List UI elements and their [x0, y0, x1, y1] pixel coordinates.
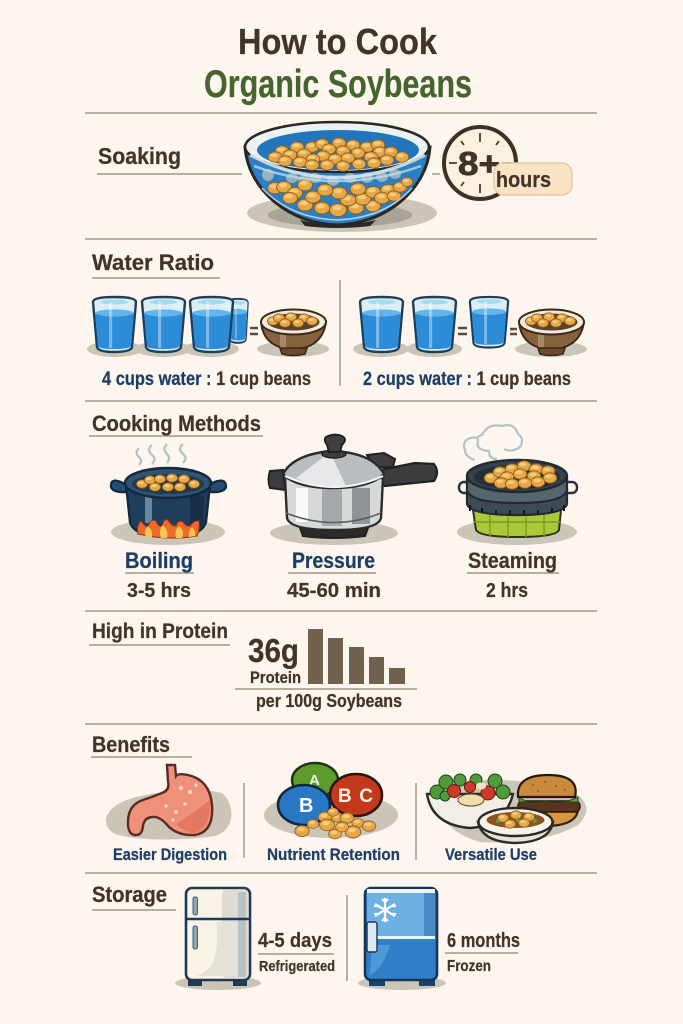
label: 4-5 days refrigerated: Refrigerated — [259, 958, 335, 975]
icon: vitamins and beans: A — [309, 772, 320, 789]
label: boiling 3-5 hrs: 3-5 hrs — [127, 580, 191, 602]
heading: storage: Storage — [92, 882, 167, 907]
section: benefits — [91, 732, 586, 864]
heading: high in protein: High in Protein — [92, 620, 228, 643]
title: Organic Soybeans — [204, 63, 472, 106]
icon: vitamins and beans: B C — [338, 786, 373, 807]
label: boiling 3-5 hrs: Boiling — [125, 548, 193, 573]
icon: snowflake — [374, 898, 396, 922]
heading: benefits: Benefits — [92, 732, 170, 757]
icon: clock with 8+ hours: 8+ — [458, 145, 500, 182]
icon: pressure cooker — [268, 434, 437, 545]
icon: clock with 8+ hours: hours — [496, 167, 551, 192]
heading: soaking: Soaking — [98, 143, 181, 169]
heading: cooking methods: Cooking Methods — [92, 411, 261, 436]
section: cooking methods — [89, 411, 577, 602]
label: 4-5 days refrigerated: 4-5 days — [258, 930, 332, 952]
section: storage — [92, 882, 520, 990]
label: 4-5 days refrigerated — [258, 930, 335, 975]
stat: 36g protein: 36g — [248, 632, 299, 669]
label: 2 cups water : 1 cup beans: 2 cups water : 1 cup beans — [363, 369, 571, 390]
icon: steamer with beans — [457, 425, 577, 545]
label: nutrient retention: Nutrient Retention — [267, 845, 400, 864]
label: easier digestion: Easier Digestion — [113, 846, 227, 864]
label: boiling 3-5 hrs — [125, 548, 194, 602]
burger — [518, 775, 580, 826]
title: How to Cook — [238, 21, 438, 62]
label: steaming 2 hrs: 2 hrs — [486, 580, 528, 602]
label: pressure 45-60 min: 45-60 min — [287, 580, 381, 602]
icon: stomach — [106, 765, 231, 840]
salad bowl — [427, 774, 513, 828]
section: soaking — [97, 122, 572, 232]
icon: freezer — [358, 888, 446, 990]
bar chart: protein — [308, 629, 405, 684]
label: 6 months frozen — [445, 930, 520, 975]
label: 6 months frozen: 6 months — [447, 930, 520, 952]
section: water ratio — [87, 250, 587, 390]
label: 4 cups water : 1 cup beans: 4 cups water : 1 cup beans — [102, 369, 311, 390]
title — [204, 21, 472, 106]
icon: vitamins and beans: B — [299, 795, 313, 817]
icon: refrigerator — [175, 888, 261, 990]
icon: boiling pot on flame — [111, 444, 226, 545]
label: steaming 2 hrs: Steaming — [468, 548, 557, 573]
diagram: 4 cups water to 1 cup beans — [87, 297, 329, 357]
label: 6 months frozen: Frozen — [447, 958, 491, 975]
caption: per 100g soybeans: per 100g Soybeans — [256, 691, 402, 711]
soup bowl — [478, 808, 553, 843]
icon: glass bowl of soaking soybeans — [245, 122, 437, 232]
label: steaming 2 hrs — [467, 548, 559, 602]
section: high in protein — [89, 620, 417, 711]
icon: clock with 8+ hours — [432, 127, 572, 199]
label: pressure 45-60 min: Pressure — [292, 548, 375, 573]
icon: vitamins and beans — [264, 763, 398, 839]
heading: water ratio: Water Ratio — [92, 250, 214, 275]
icon: salad, burger and soup — [427, 774, 586, 843]
label: versatile use: Versatile Use — [445, 845, 537, 864]
stat: 36g protein: Protein — [250, 668, 301, 687]
stat: 36g protein — [248, 632, 301, 687]
label: pressure 45-60 min — [287, 548, 381, 602]
diagram: 2 cups water to 1 cup beans — [353, 297, 587, 357]
